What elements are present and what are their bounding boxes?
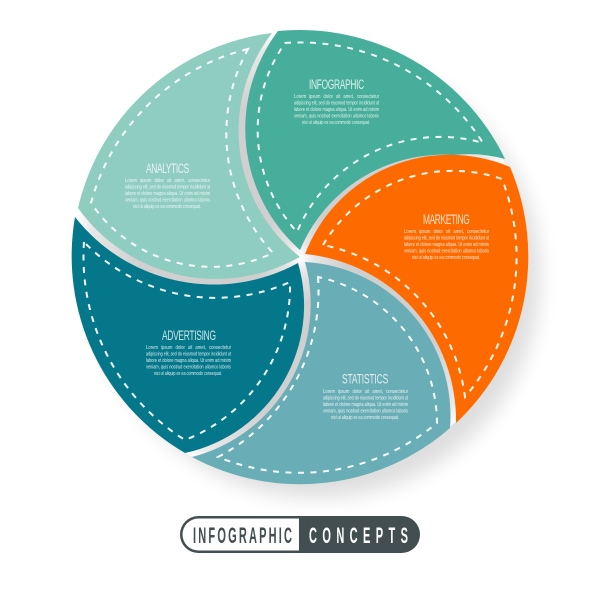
marketing body text: adipiscing elit, sed do eiusmod tempor incididunt ut: [404, 236, 489, 242]
marketing body text: labore et dolore magna aliqua. Ut enim ad minim: [404, 242, 489, 248]
analytics segment: [78, 33, 300, 279]
analytics heading: ANALYTICS: [146, 162, 189, 177]
badge: infographic concepts: [180, 516, 420, 553]
infographic heading: INFOGRAPHIC: [309, 78, 364, 93]
infographic body text: veniam, quis nostrud exercitation ullamco laboris: [294, 114, 379, 120]
analytics body text: nisi ut aliquip ex ea commodo consequat.: [133, 204, 201, 210]
advertising body text: labore et dolore magna aliqua. Ut enim ad minim: [146, 358, 231, 364]
advertising body text: [146, 345, 231, 377]
statistics body text: veniam, quis nostrud exercitation ullamco laboris: [323, 408, 408, 414]
analytics stitched outline: [91, 49, 273, 267]
panel: marketing: [305, 155, 528, 423]
infographic body text: Lorem ipsum dolor sit amet, consectetur: [294, 94, 379, 100]
advertising body text: Lorem ipsum dolor sit amet, consectetur: [146, 345, 231, 351]
infographic body text: nisi ut aliquip ex ea commodo consequat.: [302, 120, 370, 126]
marketing heading: MARKETING: [423, 213, 470, 228]
seam base disc: [74, 32, 526, 484]
analytics body text: labore et dolore magna aliqua. Ut enim ad minim: [125, 191, 210, 197]
statistics stitched outline: [218, 277, 437, 473]
marketing body text: [404, 229, 489, 261]
advertising body text: veniam, quis nostrud exercitation ullamco laboris: [146, 364, 231, 370]
analytics body text: veniam, quis nostrud exercitation ullamco laboris: [125, 198, 210, 204]
statistics heading: STATISTICS: [342, 373, 388, 387]
analytics body text: Lorem ipsum dolor sit amet, consectetur: [125, 178, 210, 184]
statistics body text: labore et dolore magna aliqua. Ut enim ad minim: [323, 402, 408, 408]
drop shadow: [96, 54, 540, 498]
marketing stitched outline: [323, 171, 517, 397]
statistics body text: nisi ut aliquip ex ea commodo consequat.: [331, 415, 399, 421]
statistics body text: adipiscing elit, sed do eiusmod tempor incididunt ut: [323, 396, 408, 402]
panel: advertising: [72, 217, 304, 453]
marketing body text: Lorem ipsum dolor sit amet, consectetur: [404, 229, 489, 235]
advertising body text: adipiscing elit, sed do eiusmod tempor incididunt ut: [146, 352, 231, 358]
analytics body text: adipiscing elit, sed do eiusmod tempor incididunt ut: [125, 184, 210, 190]
panel: infographic: [245, 30, 505, 250]
marketing segment: [305, 155, 528, 423]
infographic stitched outline: [258, 42, 483, 232]
advertising stitched outline: [83, 242, 290, 440]
badge word infographic: INFOGRAPHIC: [193, 523, 292, 548]
statistics body text: Lorem ipsum dolor sit amet, consectetur: [323, 389, 408, 395]
infographic segment: [245, 30, 505, 250]
panel: statistics: [192, 262, 450, 484]
statistics segment: [192, 262, 450, 484]
analytics body text: [125, 178, 210, 210]
advertising segment: [72, 217, 304, 453]
advertising body text: nisi ut aliquip ex ea commodo consequat.: [154, 371, 222, 377]
badge white left part: [182, 518, 299, 550]
advertising heading: ADVERTISING: [162, 329, 216, 344]
infographic body text: adipiscing elit, sed do eiusmod tempor incididunt ut: [294, 100, 379, 106]
badge word concepts: CONCEPTS: [309, 523, 408, 548]
infographic body text: [294, 94, 379, 126]
panel: analytics: [78, 33, 300, 279]
marketing body text: nisi ut aliquip ex ea commodo consequat.: [412, 255, 480, 261]
statistics body text: [323, 389, 408, 421]
infographic body text: labore et dolore magna aliqua. Ut enim ad minim: [294, 107, 379, 113]
marketing body text: veniam, quis nostrud exercitation ullamco laboris: [404, 248, 489, 254]
badge dark pill: [180, 516, 420, 553]
